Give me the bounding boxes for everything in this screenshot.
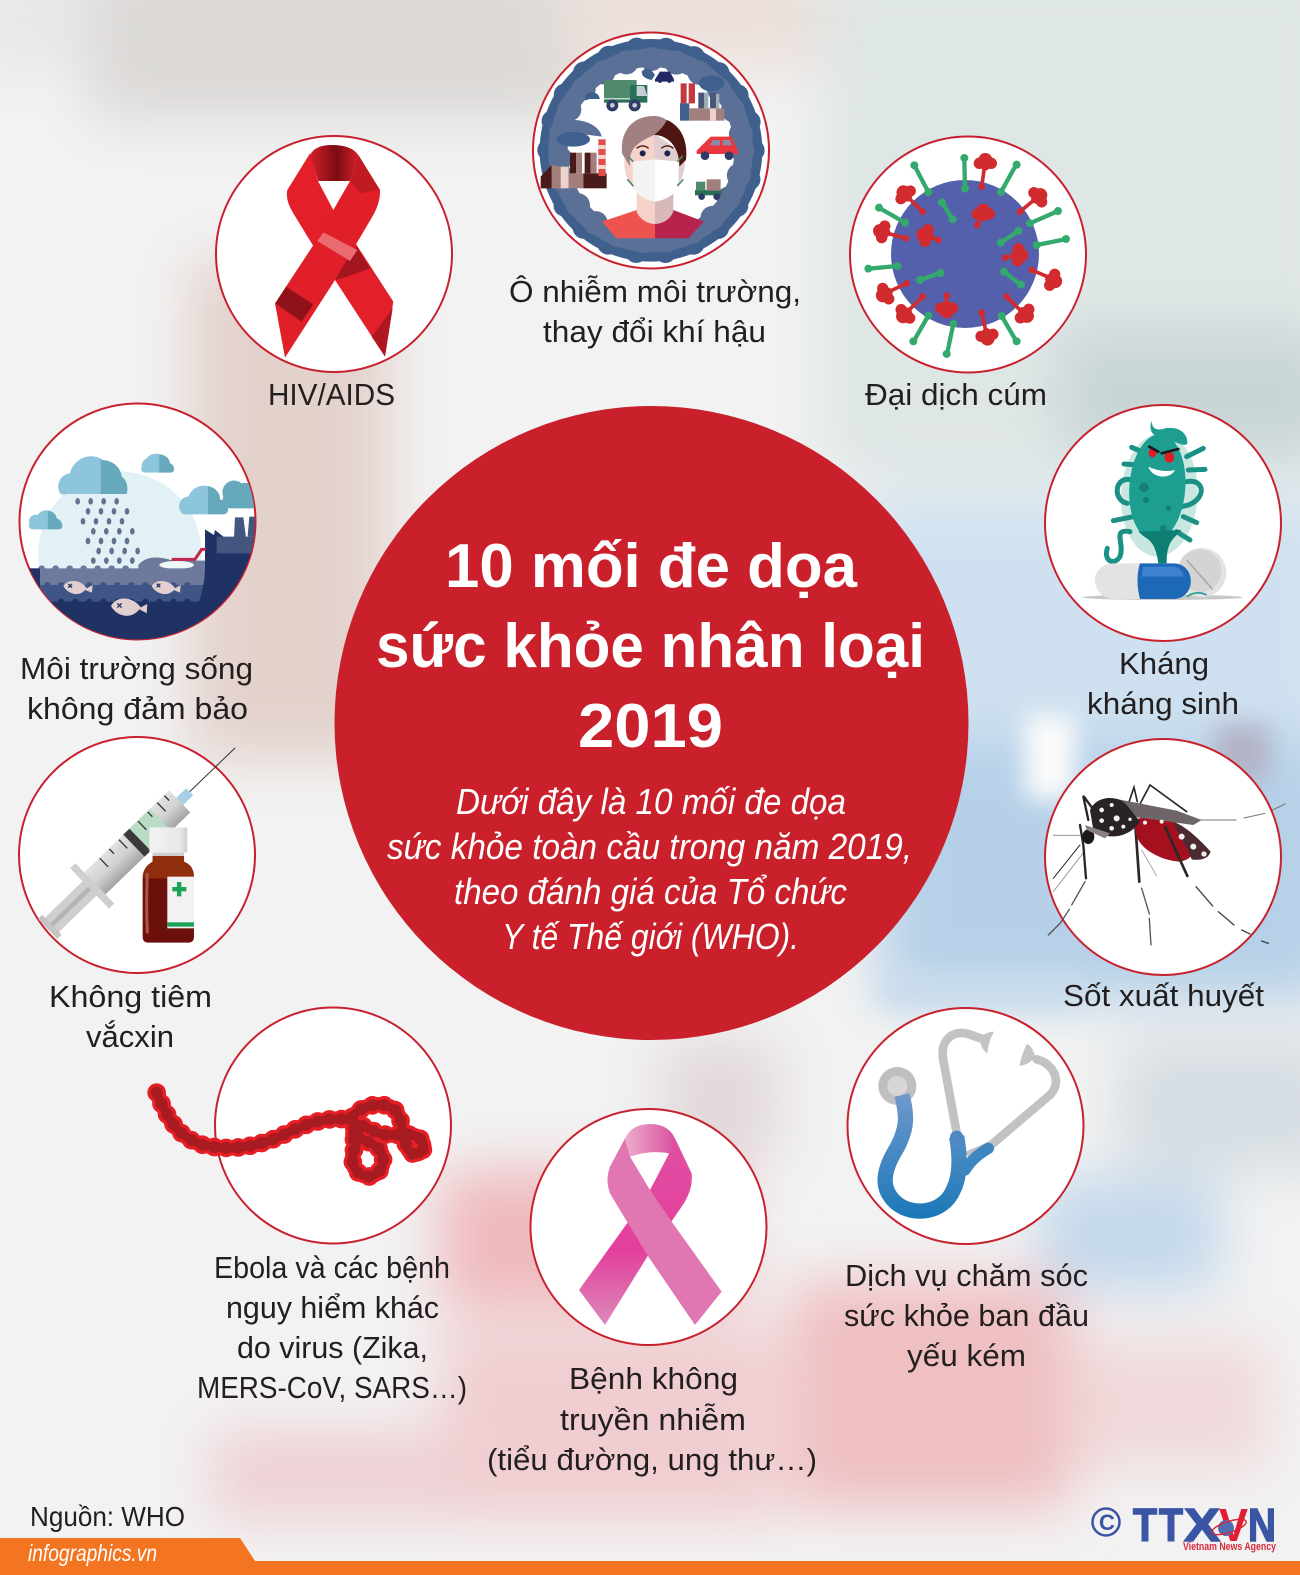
icon: bacterium on pills <box>1083 421 1243 600</box>
label: vaccine hesitancy: Không tiêm <box>49 979 212 1014</box>
intro text: theo đánh giá của Tổ chức <box>454 871 847 912</box>
label: vaccine hesitancy <box>49 979 212 1054</box>
logo: TTXVN: N <box>1248 1499 1276 1551</box>
label: pollution: thay đổi khí hậu <box>543 314 766 349</box>
label: vaccine hesitancy: vắcxin <box>86 1019 174 1054</box>
title: 10 mối đe dọa <box>445 532 858 601</box>
icon: influenza virus <box>868 153 1066 354</box>
label: ebola <box>197 1250 467 1405</box>
logo: TTXVN: T <box>1159 1499 1183 1551</box>
panel: flu pandemic <box>850 136 1086 372</box>
icon: pollution <box>541 48 754 253</box>
panel: ebola <box>157 1008 451 1244</box>
label: flu pandemic: Đại dịch cúm <box>865 377 1047 412</box>
icon: red ribbon <box>275 145 393 358</box>
label: noncommunicable diseases: (tiểu đường, ung thư…) <box>487 1442 817 1477</box>
label: pollution <box>509 274 801 349</box>
label: weak primary care: sức khỏe ban đầu <box>844 1298 1089 1333</box>
label: antibiotic resistance <box>1087 646 1239 721</box>
icon: polluted water <box>27 454 258 647</box>
label: ebola: MERS-CoV, SARS…) <box>197 1370 467 1405</box>
icon: pink ribbon <box>579 1124 722 1325</box>
label: noncommunicable diseases <box>487 1361 817 1477</box>
label: unsafe environment: không đảm bảo <box>27 691 248 726</box>
label: unsafe environment <box>20 651 253 726</box>
label: weak primary care: Dịch vụ chăm sóc <box>845 1258 1088 1293</box>
logo: TTXVN: Vietnam News Agency <box>1183 1541 1277 1553</box>
label: weak primary care <box>844 1258 1089 1373</box>
source note: Nguồn: WHO <box>30 1501 185 1532</box>
label: noncommunicable diseases: truyền nhiễm <box>560 1402 746 1437</box>
logo: TTXVN: C <box>1099 1510 1115 1535</box>
intro text: Dưới đây là 10 mối đe dọa <box>456 781 846 822</box>
panel: HIV/AIDS <box>216 136 452 372</box>
panel: unsafe environment <box>20 404 258 647</box>
icon: mosquito <box>1048 785 1285 945</box>
icon: syringe and bottle <box>28 728 255 949</box>
label: antibiotic resistance: kháng sinh <box>1087 686 1239 721</box>
label: unsafe environment: Môi trường sống <box>20 651 253 686</box>
label: ebola: nguy hiểm khác <box>226 1290 439 1325</box>
logo: TTXVN: V <box>1219 1499 1248 1551</box>
label: HIV/AIDS: HIV/AIDS <box>268 377 395 412</box>
label: ebola: do virus (Zika, <box>237 1330 428 1365</box>
intro text: Y tế Thế giới (WHO). <box>502 916 799 957</box>
panel: antibiotic resistance <box>1045 405 1281 641</box>
title: sức khỏe nhân loại <box>376 612 925 681</box>
panel: weak primary care <box>848 1008 1084 1244</box>
label: noncommunicable diseases: Bệnh không <box>569 1361 738 1396</box>
logo: TTXVN: T <box>1133 1499 1157 1551</box>
logo: TTXVN: X <box>1184 1499 1220 1551</box>
intro text <box>387 781 912 957</box>
central red disc <box>334 406 968 1040</box>
label: weak primary care: yếu kém <box>907 1338 1026 1373</box>
title: 2019 <box>578 692 723 761</box>
panel: vaccine hesitancy <box>19 728 255 973</box>
panel: pollution <box>533 32 769 268</box>
footer bar <box>0 1538 1300 1575</box>
icon: ebola virus <box>157 1093 424 1177</box>
label: dengue: Sốt xuất huyết <box>1063 978 1264 1013</box>
logo: TTXVN <box>1092 1499 1277 1553</box>
intro text: sức khỏe toàn cầu trong năm 2019, <box>387 826 912 867</box>
title <box>376 532 925 761</box>
icon: stethoscope <box>878 1032 1056 1211</box>
label: ebola: Ebola và các bệnh <box>214 1250 450 1285</box>
panel: noncommunicable diseases <box>530 1109 766 1345</box>
panel: dengue <box>1045 739 1285 975</box>
label: pollution: Ô nhiễm môi trường, <box>509 274 801 309</box>
label: antibiotic resistance: Kháng <box>1119 646 1209 681</box>
footer site name: infographics.vn <box>28 1540 157 1566</box>
